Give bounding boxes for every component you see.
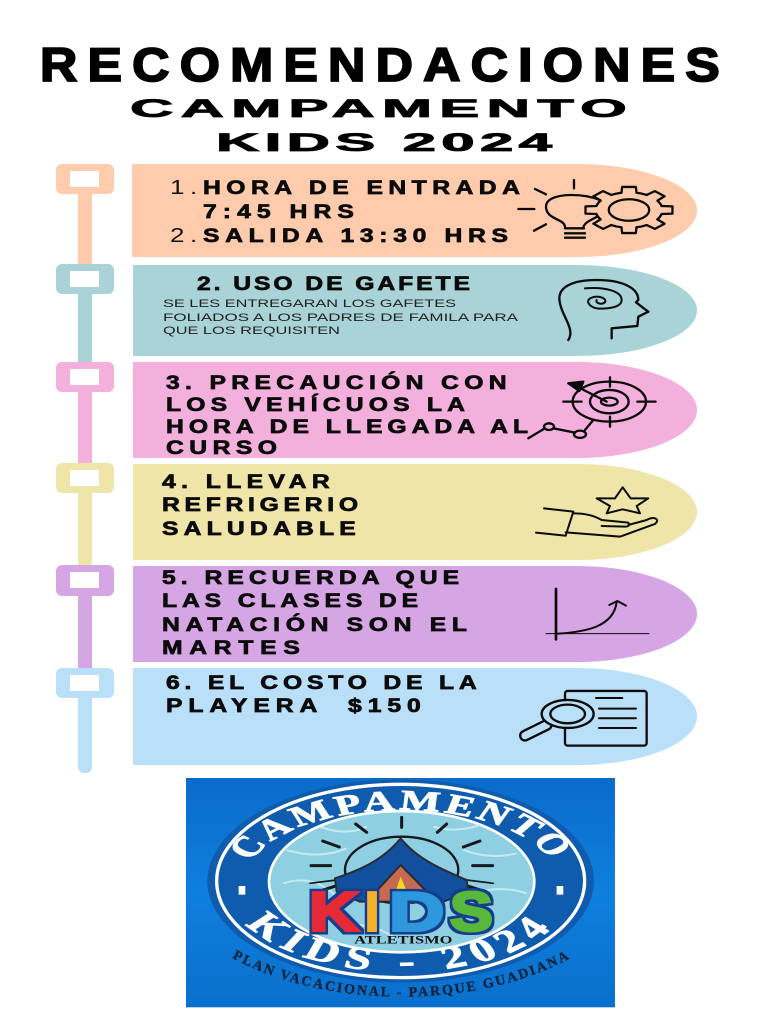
panel 1: horario: [132, 164, 697, 257]
KIDS lettering: I: [365, 881, 379, 943]
icon: magnifier over document: [525, 691, 647, 746]
logo: campamento kids: [186, 778, 615, 1008]
connector 4: [56, 463, 114, 566]
panel 6 line 1: 6. EL COSTO DE LA: [166, 672, 477, 693]
panel 2 body line 2: FOLIADOS A LOS PADRES DE FAMILA PARA: [163, 312, 519, 324]
panel 6 line 2: PLAYERA $150: [166, 695, 421, 716]
KIDS lettering: [309, 881, 493, 943]
connector 3: [56, 362, 114, 464]
numeral 1: 1.: [170, 176, 197, 198]
plan vacacional arc text: PLAN VACACIONAL - PARQUE GUADIANA: [232, 950, 570, 997]
KIDS lettering: S: [450, 881, 493, 943]
panel 4 line 2: REFRIGERIO: [162, 494, 358, 515]
KIDS 2024 arc text: KIDS - 2024: [244, 910, 550, 970]
panel 5 line 4: MARTES: [162, 637, 300, 658]
tent: [335, 838, 468, 903]
icon: target with arrow: [528, 377, 656, 438]
panel 5: natacion: [133, 566, 697, 662]
timeline connectors: [56, 164, 114, 773]
header: [40, 39, 720, 156]
icon: rising curve chart: [546, 589, 649, 639]
KIDS lettering: K: [309, 881, 359, 943]
entry time text: HORA DE ENTRADA: [203, 177, 520, 198]
panel 2 heading: 2. USO DE GAFETE: [197, 273, 470, 294]
subtitle line 1: CAMPAMENTO: [130, 94, 627, 122]
CAMPAMENTO arc text: CAMPAMENTO: [232, 790, 568, 857]
water ripples: [283, 825, 527, 937]
panel 2 body line 1: SE LES ENTREGARAN LOS GAFETES: [163, 298, 456, 310]
panel 5 line 3: NATACIÓN SON EL: [162, 614, 467, 635]
panel 3 line 1: 3. PRECAUCIÓN CON: [166, 372, 507, 393]
panel 3: precaucion: [133, 362, 697, 458]
subtitle line 2: KIDS 2024: [216, 128, 553, 156]
sun rays and circle: [310, 817, 493, 903]
side dots: [239, 886, 563, 895]
atletismo label: ATLETISMO: [354, 934, 453, 946]
panel 5 line 2: LAS CLASES DE: [162, 590, 418, 611]
panel 6: playera: [133, 668, 697, 765]
connector 5: [56, 565, 114, 669]
connector 6: [56, 668, 114, 773]
panel 4: refrigerio: [133, 464, 697, 560]
icon: head with spiral: [559, 280, 648, 340]
entry hour: 7:45 HRS: [203, 201, 354, 222]
panel 3 line 2: LOS VEHÍCUOS LA: [166, 394, 465, 415]
title: RECOMENDACIONES: [40, 39, 720, 91]
icon: hand holding star: [536, 487, 657, 537]
panel 2: gafete: [133, 265, 697, 356]
panel 2 body line 3: QUE LOS REQUISITEN: [163, 325, 340, 337]
numeral 2: 2.: [170, 224, 197, 246]
panel 3 line 4: CURSO: [166, 437, 277, 458]
panel 4 line 1: 4. LLEVAR: [162, 471, 330, 492]
panel 5 line 1: 5. RECUERDA QUE: [162, 567, 459, 588]
icon: light bulb and gear: [518, 180, 672, 238]
panel 3 line 3: HORA DE LLEGADA AL: [166, 416, 528, 437]
connector 2: [56, 264, 114, 364]
panel 4 line 3: SALUDABLE: [162, 518, 356, 539]
KIDS lettering: D: [389, 881, 444, 943]
connector 1: [56, 164, 114, 266]
exit time text: SALIDA 13:30 HRS: [203, 225, 508, 246]
